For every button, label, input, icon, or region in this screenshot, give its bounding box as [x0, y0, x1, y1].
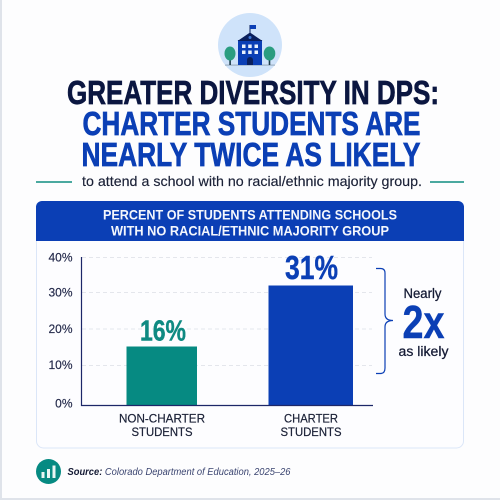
label: charter students: CHARTER [284, 412, 338, 426]
callout: nearly 2x as likely [398, 286, 449, 359]
y axis labels: 30% [48, 286, 73, 300]
bar: non-charter [126, 346, 197, 406]
bracket [376, 268, 393, 374]
label: non-charter students: STUDENTS [132, 425, 192, 439]
label: charter students: STUDENTS [280, 425, 342, 439]
icon: source chart badge [36, 459, 61, 484]
panel: chart card [36, 201, 464, 448]
title line: nearly twice: NEARLY TWICE AS LIKELY [82, 136, 420, 173]
callout: nearly 2x as likely: as likely [398, 344, 449, 359]
label: non-charter students: NON-CHARTER [119, 412, 205, 426]
y axis labels: 0% [55, 396, 73, 410]
bar: charter [268, 286, 353, 406]
y axis labels: 20% [48, 322, 73, 336]
value: 31%: 31% [285, 249, 338, 286]
panel header [36, 201, 464, 241]
bar chart [48, 249, 373, 439]
y axis labels [48, 250, 73, 410]
header line 2: WITH NO RACIAL/ETHNIC MAJORITY GROUP [111, 222, 389, 238]
value: 16%: 16% [140, 316, 186, 348]
header line 1: PERCENT OF STUDENTS ATTENDING SCHOOLS [103, 206, 397, 222]
source note: Source: Colorado Department of Education, 2025–26 [68, 467, 291, 478]
title [67, 74, 439, 173]
subtitle: to attend a school with no racial/ethnic majority group. [82, 173, 422, 189]
callout: nearly 2x as likely: Nearly [404, 286, 442, 301]
title line: charter students: CHARTER STUDENTS ARE [82, 105, 420, 142]
y axis labels: 40% [48, 250, 73, 264]
callout: nearly 2x as likely: 2x [402, 296, 445, 348]
y axis labels: 10% [48, 358, 73, 372]
icon: school building [218, 13, 282, 77]
